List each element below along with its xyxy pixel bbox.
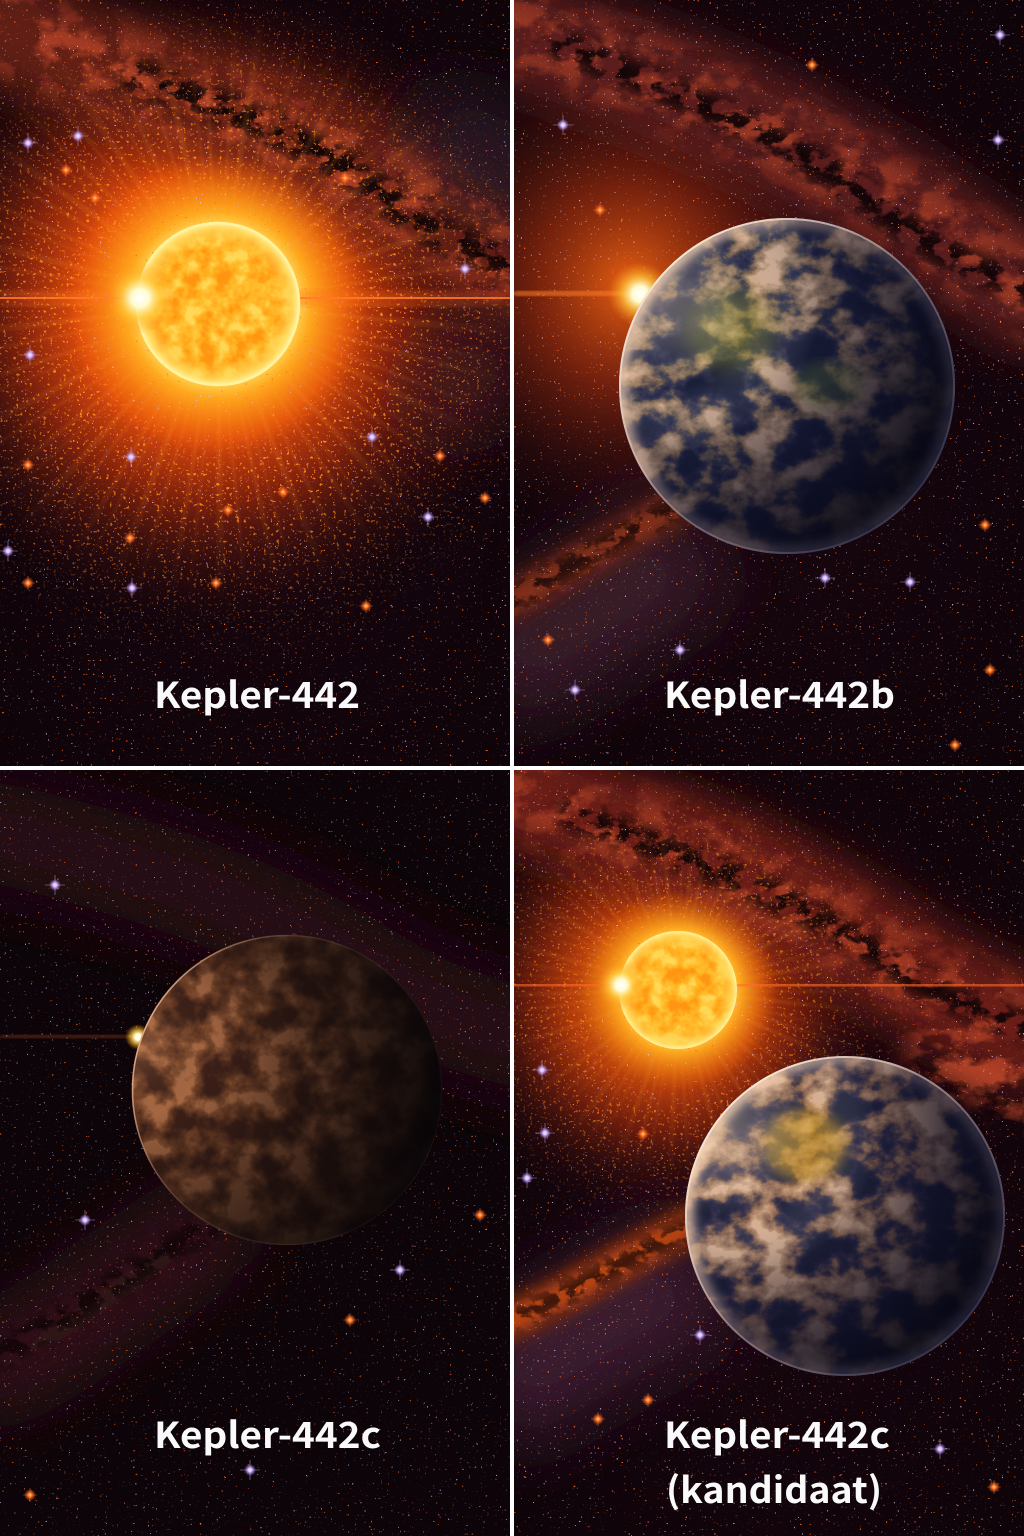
label: (kandidaat) <box>666 1462 882 1514</box>
bright stars <box>0 126 492 613</box>
radial rays <box>38 124 398 484</box>
star disc <box>619 931 737 1049</box>
bright stars <box>23 875 487 1502</box>
horizontal flare <box>514 984 1024 986</box>
bright stars <box>541 25 1010 752</box>
starfield <box>514 0 1024 766</box>
star disc <box>137 223 299 385</box>
panel: Kepler-442 star <box>0 0 560 766</box>
nebula bands <box>480 780 1024 1400</box>
star glow <box>440 770 890 1220</box>
label: Kepler-442c <box>664 1407 890 1459</box>
label: Kepler-442 <box>154 667 360 719</box>
starfield <box>0 0 510 766</box>
nebula bands <box>480 20 1024 680</box>
label <box>664 1407 890 1514</box>
nebula band <box>0 10 560 420</box>
planet <box>132 935 442 1245</box>
label: Kepler-442c <box>154 1407 381 1459</box>
dim nebula bands <box>0 820 570 1385</box>
label: Kepler-442b <box>664 667 895 719</box>
planet <box>685 1056 1005 1376</box>
star glow <box>0 11 485 598</box>
starfield <box>514 770 1024 1536</box>
horizontal flare <box>0 1035 140 1038</box>
starfield <box>0 770 510 1536</box>
radial rays <box>548 860 808 1120</box>
planet <box>619 218 955 554</box>
horizontal flare <box>514 291 644 296</box>
panel: Kepler-442b planet <box>514 0 1024 766</box>
sun glow behind planet <box>514 102 810 496</box>
flare highlight <box>106 264 172 332</box>
panel: Kepler-442c dark planet <box>0 770 570 1536</box>
panel: Kepler-442c candidate <box>440 770 1024 1536</box>
horizontal lens flare <box>0 290 510 306</box>
bright stars <box>517 1060 1001 1494</box>
